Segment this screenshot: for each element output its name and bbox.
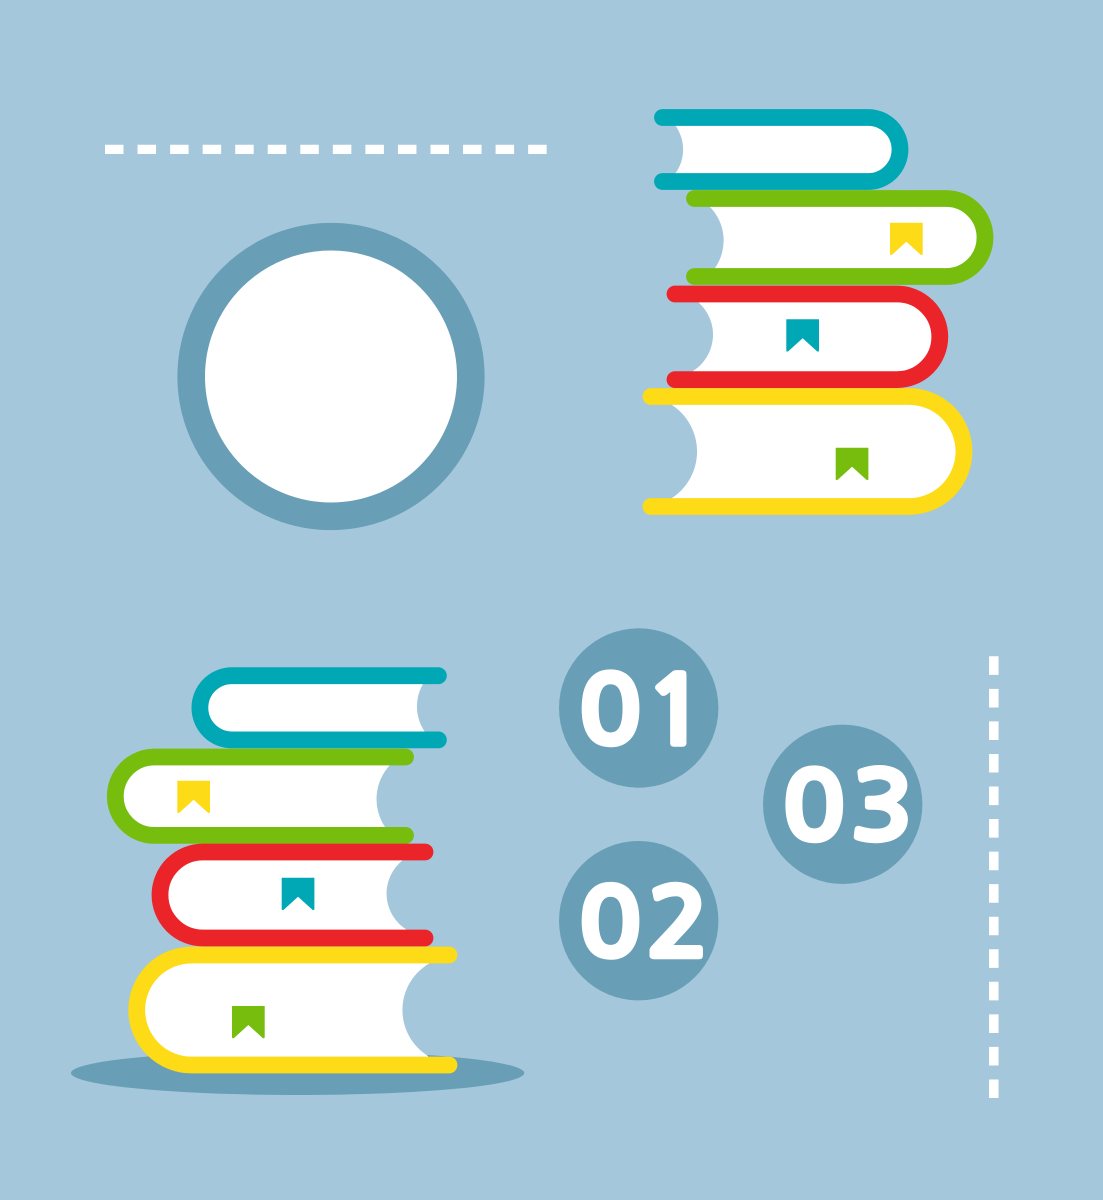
book: red <box>675 294 940 380</box>
number badge 03 <box>763 725 922 884</box>
bookmark: yellow <box>177 781 210 813</box>
number badge 03: 03 <box>782 760 914 854</box>
book: green <box>115 757 406 835</box>
bookmark: yellow <box>890 223 923 255</box>
book: teal <box>662 118 900 182</box>
number badge 02: 02 <box>578 877 710 971</box>
bookmark: green <box>836 448 868 480</box>
book: red <box>160 852 425 938</box>
number badge 01 <box>559 628 718 788</box>
bookmark: teal <box>786 319 819 352</box>
book: green <box>694 198 985 276</box>
empty circle badge <box>191 237 471 516</box>
book stack: top right <box>651 118 985 506</box>
number badge 02 <box>559 841 718 1000</box>
book: teal <box>200 676 438 740</box>
bookmark: teal <box>282 878 314 910</box>
book stack with shadow: bottom left <box>71 676 524 1095</box>
bookmark: green <box>232 1006 265 1038</box>
book: yellow <box>137 955 449 1065</box>
book: yellow <box>651 396 964 506</box>
shadow ellipse <box>71 1051 524 1095</box>
number badge 01: 01 <box>578 664 708 758</box>
